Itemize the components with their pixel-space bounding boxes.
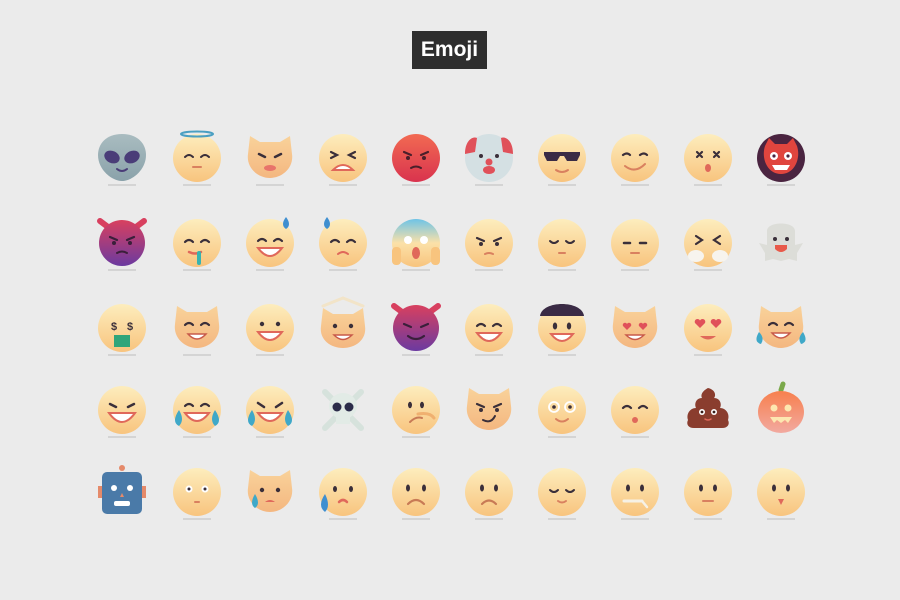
emoji: smirk wink [611, 134, 659, 182]
title [412, 31, 487, 69]
emoji: poop [687, 388, 729, 428]
emoji: smirk cat [467, 388, 511, 430]
emoji: relieved [538, 468, 586, 516]
emoji: neutral [684, 468, 732, 516]
emoji: alien [98, 134, 146, 181]
emoji: heart eyes cat [613, 306, 657, 348]
emoji: money mouth: $ [127, 321, 133, 333]
emoji: robot [98, 465, 146, 514]
emoji: kissing [611, 386, 659, 434]
emoji: red angry [392, 134, 440, 182]
emoji: drooling [173, 219, 221, 267]
emoji: grimace angry [319, 134, 367, 182]
emoji: laughing [465, 304, 513, 352]
emoji: frown 2 [465, 468, 513, 516]
emoji: rofl [246, 386, 294, 434]
emoji: pumpkin [758, 384, 804, 433]
emoji: scream [392, 219, 440, 267]
emoji: heart eyes [684, 304, 732, 352]
emoji: angry [465, 219, 513, 267]
emoji: smiley cat [175, 306, 219, 348]
emoji: sad tear [319, 468, 367, 516]
emoji: cat with hat [321, 298, 365, 348]
emoji: grinning squint [98, 386, 146, 434]
emoji: thinking [392, 386, 440, 434]
emoji: frown [392, 468, 440, 516]
emoji: joy cat [756, 306, 806, 348]
emoji: crying cat [248, 470, 292, 512]
emoji: dizzy [684, 134, 732, 182]
emoji: pensive [538, 219, 586, 267]
emoji: joy [173, 386, 221, 434]
emoji: surprised [757, 468, 805, 516]
emoji: zipper mouth [611, 468, 659, 516]
emoji: clown [465, 134, 513, 182]
emoji: skull [325, 392, 361, 428]
emoji: sweat grin [246, 217, 294, 267]
emoji: nerd glasses [538, 386, 586, 434]
emoji: ghost [759, 224, 803, 261]
emoji: money mouth: $ [111, 321, 117, 333]
emoji: grin [246, 304, 294, 352]
emoji: angel [173, 132, 221, 182]
emoji: ogre [757, 134, 805, 182]
emoji: expressionless [611, 219, 659, 267]
emoji: hat boy [538, 304, 586, 352]
emoji: devil angry [99, 220, 145, 266]
emoji: blank stare [173, 468, 221, 516]
emoji: smiling devil [393, 305, 439, 351]
emoji: sunglasses [538, 134, 586, 182]
emoji: sweat sad [319, 217, 367, 267]
emoji: steam [684, 219, 732, 267]
title: Emoji [421, 38, 478, 61]
emoji: angry cat [248, 136, 292, 178]
emoji: money mouth [98, 304, 146, 352]
